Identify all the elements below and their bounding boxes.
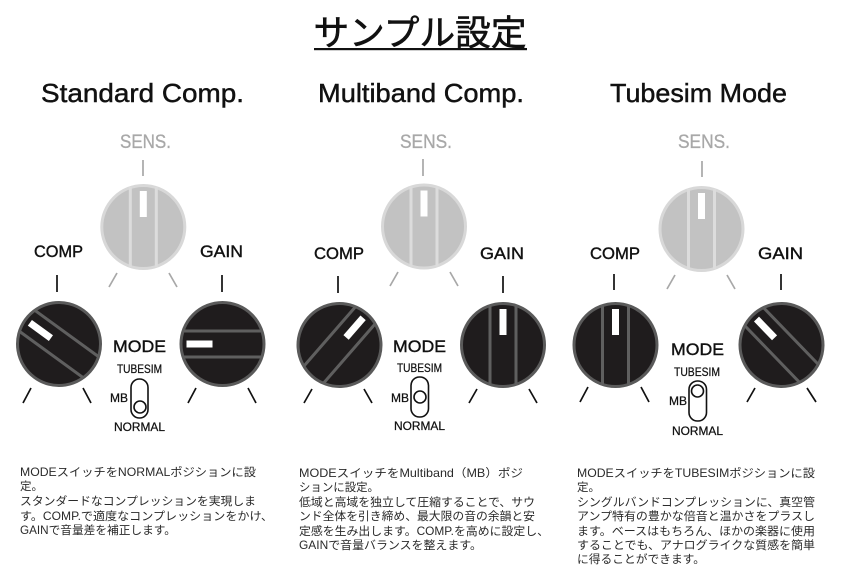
mode switch: NORMAL	[110, 337, 166, 434]
knob: GAIN	[462, 244, 544, 403]
mode switch: TUBESIM: MODE	[671, 340, 724, 359]
mode switch: TUBESIM	[669, 340, 724, 438]
text block: Multiband Comp. description: ションに設定。	[299, 481, 379, 494]
text block: Multiband Comp. description: MODEスイッチをMultiband（MB）ポジ	[299, 466, 523, 480]
heading: Standard Comp.: Standard Comp.	[41, 78, 244, 108]
mode switch: MB: TUBESIM	[397, 361, 442, 375]
panel: Multiband Comp. controls	[281, 132, 544, 433]
mode switch: NORMAL: TUBESIM	[117, 362, 162, 376]
mode switch: TUBESIM: TUBESIM	[674, 365, 720, 379]
panel: Tubesim Mode controls	[574, 132, 840, 438]
knob: GAIN: GAIN	[480, 244, 524, 263]
text block: Standard Comp. description: MODEスイッチをNORMALポジションに設	[20, 466, 256, 479]
text block: Tubesim Mode description	[577, 467, 815, 566]
heading: Multiband Comp.: Multiband Comp.	[318, 78, 524, 108]
text block: Tubesim Mode description: アンプ特有の豊かな倍音と温かさをプラスし	[577, 509, 815, 523]
text block: Standard Comp. description: GAINで音量差を補正します。	[20, 523, 176, 537]
knob: GAIN	[181, 242, 264, 403]
mode switch: MB	[391, 337, 446, 433]
text block: Multiband Comp. description: GAINで音量バランスを整えます。	[299, 538, 482, 552]
text block: Tubesim Mode description: ます。ベースはもちろん、ほかの楽器に使用	[577, 524, 815, 538]
text block: Multiband Comp. description: 定感を生み出します。COMP.を高めに設定し、	[299, 524, 549, 538]
mode switch: NORMAL: NORMAL	[114, 420, 165, 434]
knob: COMP	[281, 244, 398, 404]
mode switch: NORMAL: MODE	[113, 337, 166, 356]
text block: Standard Comp. description: スタンダードなコンプレッションを実現しま	[20, 494, 256, 508]
knob: COMP: COMP	[34, 242, 83, 261]
knob: SENS: SENS.	[120, 132, 171, 153]
knob: COMP	[574, 244, 657, 402]
title: サンプル設定	[314, 13, 526, 53]
knob: SENS: SENS.	[400, 132, 452, 153]
text block: Multiband Comp. description: ンド全体を引き締め、最大限の音の余韻と安	[299, 509, 535, 523]
knob: COMP: COMP	[590, 244, 640, 263]
knob: COMP	[1, 242, 117, 403]
knob: SENS: SENS.	[678, 132, 730, 153]
mode switch: NORMAL: MB	[110, 391, 128, 405]
text block: Tubesim Mode description: に得ることができます。	[577, 552, 705, 566]
panel: Standard Comp. controls	[1, 132, 264, 434]
text block: Standard Comp. description: 定。	[20, 480, 43, 493]
text block: Standard Comp. description	[20, 466, 273, 537]
knob: GAIN	[723, 244, 840, 404]
knob: COMP: COMP	[314, 244, 364, 263]
mode switch: TUBESIM: NORMAL	[672, 424, 723, 438]
text block: Tubesim Mode description: することでも、アナログライクな質感を簡単	[577, 538, 815, 552]
text block: Tubesim Mode description: 定。	[577, 481, 600, 494]
knob: SENS	[102, 132, 185, 287]
text block: Tubesim Mode description: シングルバンドコンプレッションに、真空管	[577, 495, 815, 509]
knob: GAIN: GAIN	[200, 242, 243, 261]
mode switch: TUBESIM: MB	[669, 394, 687, 408]
mode switch: MB: MB	[391, 391, 409, 405]
knob: GAIN: GAIN	[758, 244, 803, 263]
mode switch: MB: MODE	[393, 337, 446, 356]
knob: SENS	[660, 132, 743, 289]
knob: SENS	[382, 132, 466, 286]
text block: Multiband Comp. description	[299, 466, 549, 552]
text block: Standard Comp. description: す。COMP.で適度なコンプレッションをかけ、	[20, 509, 273, 523]
text block: Tubesim Mode description: MODEスイッチをTUBESIMポジションに設	[577, 467, 815, 480]
text block: Multiband Comp. description: 低域と高域を独立して圧縮することで、サウ	[299, 495, 535, 509]
mode switch: MB: NORMAL	[394, 419, 445, 433]
heading: Tubesim Mode: Tubesim Mode	[610, 78, 787, 108]
